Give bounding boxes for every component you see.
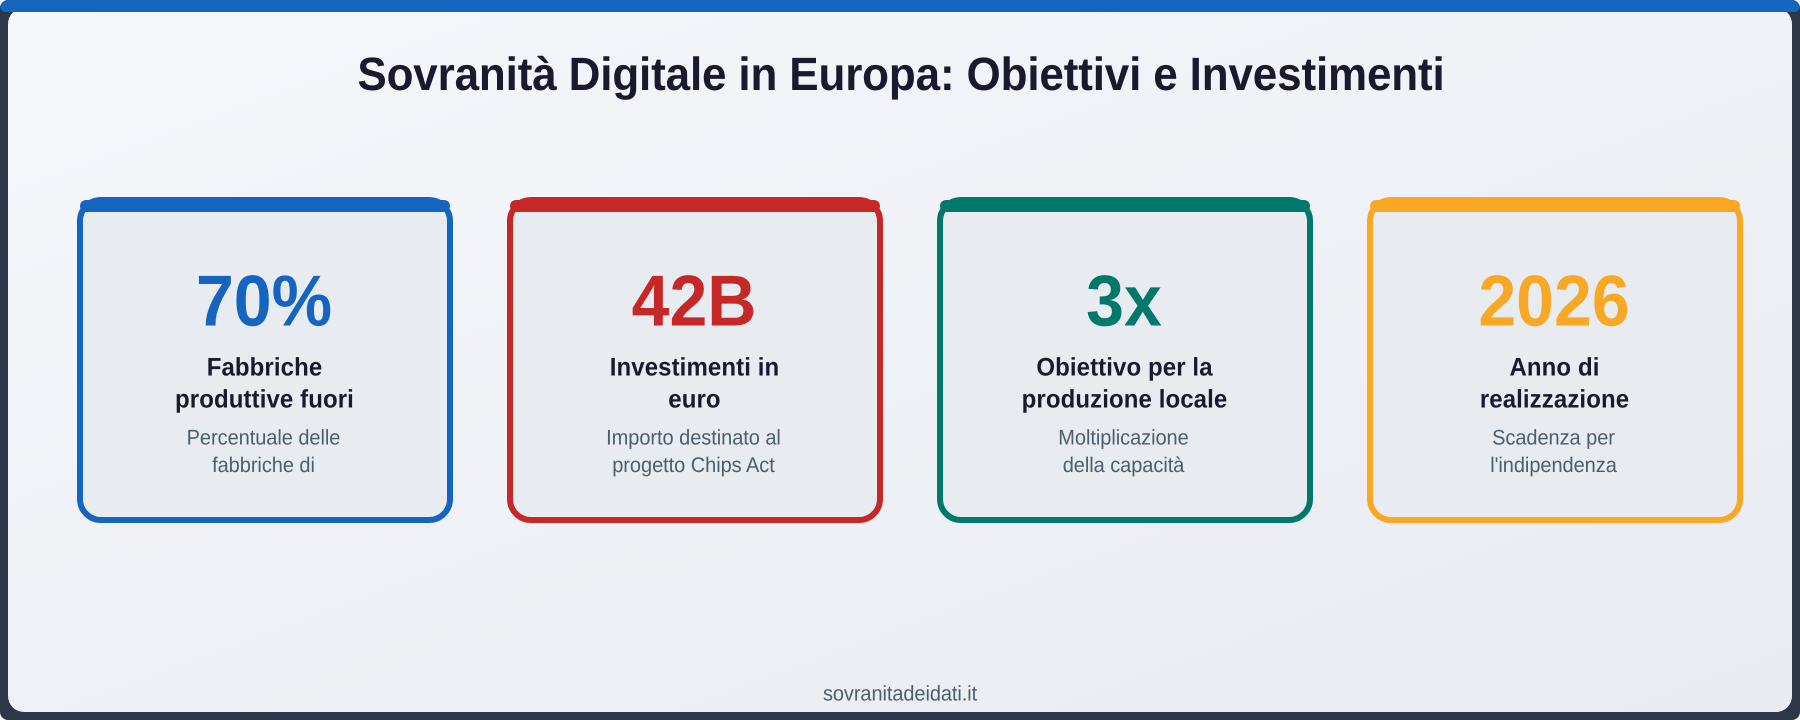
description: scadenza	[1490, 426, 1617, 477]
title: Sovranità Digitale in Europa: Obiettivi e Investimenti	[357, 48, 1445, 100]
label: anno: realizzazione	[1480, 385, 1629, 414]
label: obiettivo	[1022, 353, 1227, 414]
description: importo	[606, 426, 781, 477]
description: scadenza: Scadenza per	[1492, 426, 1615, 449]
stat: 42B: 42B	[632, 261, 756, 341]
description: moltiplicazione: della capacità	[1063, 454, 1184, 477]
panel: card 70%	[77, 197, 453, 523]
description: scadenza: l'indipendenza	[1490, 454, 1617, 477]
label: investimenti: euro	[668, 385, 721, 414]
description: moltiplicazione: Moltiplicazione	[1058, 426, 1189, 449]
panel: card 3x	[937, 197, 1313, 523]
description: percentuale: fabbriche di	[212, 454, 315, 477]
stat: 3x: 3x	[1086, 261, 1162, 341]
label: fabbriche	[175, 353, 354, 414]
label: investimenti	[610, 353, 779, 414]
label: fabbriche: Fabbriche	[207, 353, 322, 382]
label: anno: Anno di	[1509, 353, 1600, 382]
description: moltiplicazione	[1058, 426, 1189, 477]
stat: 70%: 70%	[196, 261, 332, 341]
top accent bar	[0, 0, 1800, 12]
stat: 2026: 2026	[1478, 261, 1630, 341]
label: obiettivo: produzione locale	[1022, 385, 1227, 414]
description: importo: Importo destinato al	[606, 426, 781, 449]
footer: sovranitadeidati.it	[823, 682, 977, 706]
panel: card 2026	[1367, 197, 1743, 523]
description: importo: progetto Chips Act	[612, 454, 775, 477]
label: obiettivo: Obiettivo per la	[1036, 353, 1213, 382]
description: percentuale: Percentuale delle	[187, 426, 340, 449]
label: anno	[1480, 353, 1629, 414]
label: investimenti: Investimenti in	[610, 353, 779, 382]
description: percentuale	[187, 426, 340, 477]
label: fabbriche: produttive fuori	[175, 385, 354, 414]
panel: card 42B	[507, 197, 883, 523]
